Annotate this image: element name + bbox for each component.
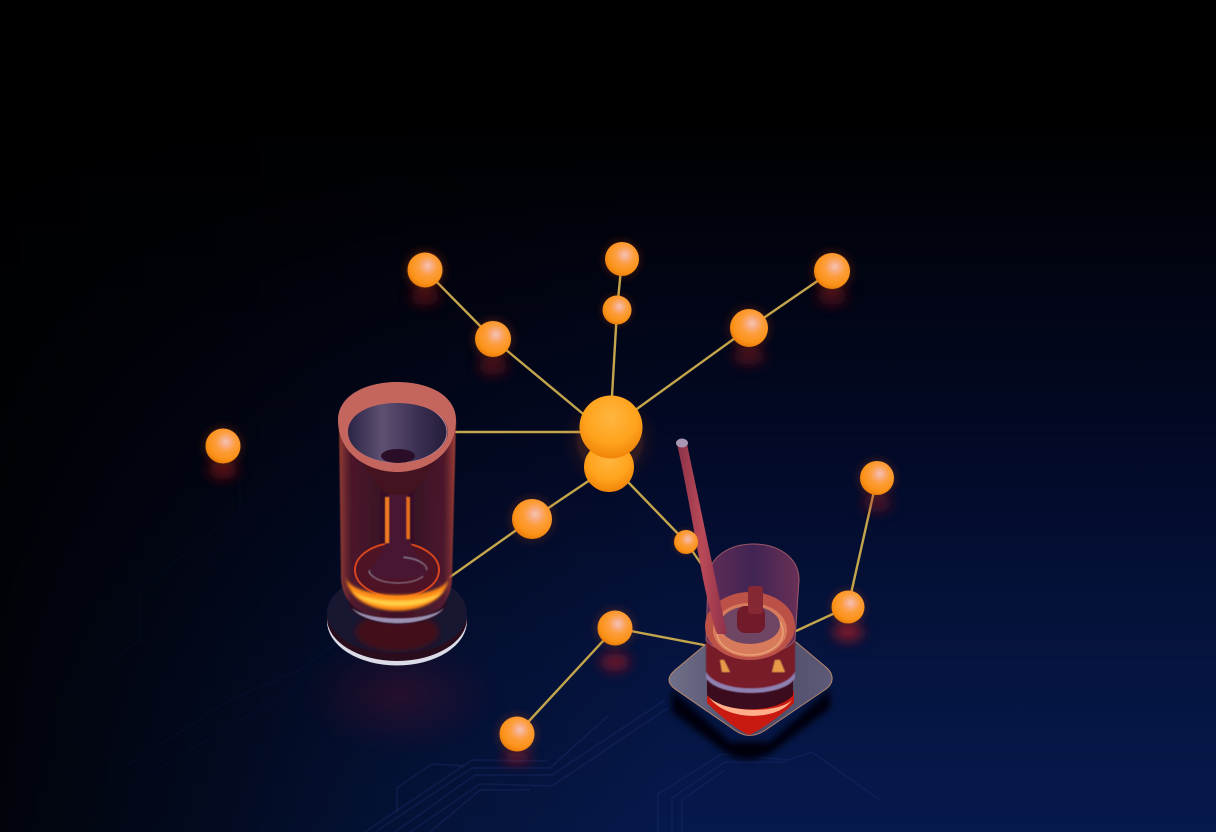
connecting lines [425,259,877,734]
cylinder body [339,420,456,626]
liquid disc [705,592,795,660]
rim [338,382,456,472]
floor red glow under vessels [300,635,500,755]
glass base glow [707,680,794,735]
vessel: short glass on square plate with rod [669,438,832,760]
round base plate [327,572,467,666]
sphere floor reflections [208,287,891,764]
funnel cone [347,401,448,495]
glowing liquid ring [346,543,449,611]
glass lower body [706,625,795,693]
vessel: tall glass with funnel on round base [327,382,467,666]
rod [676,438,727,634]
square plate [669,642,832,760]
funnel stem [368,494,428,583]
spheres [197,234,902,760]
circuit traces on floor [60,480,880,832]
central post [737,586,765,633]
glass upper [706,544,799,655]
central hub spheres [560,390,660,492]
